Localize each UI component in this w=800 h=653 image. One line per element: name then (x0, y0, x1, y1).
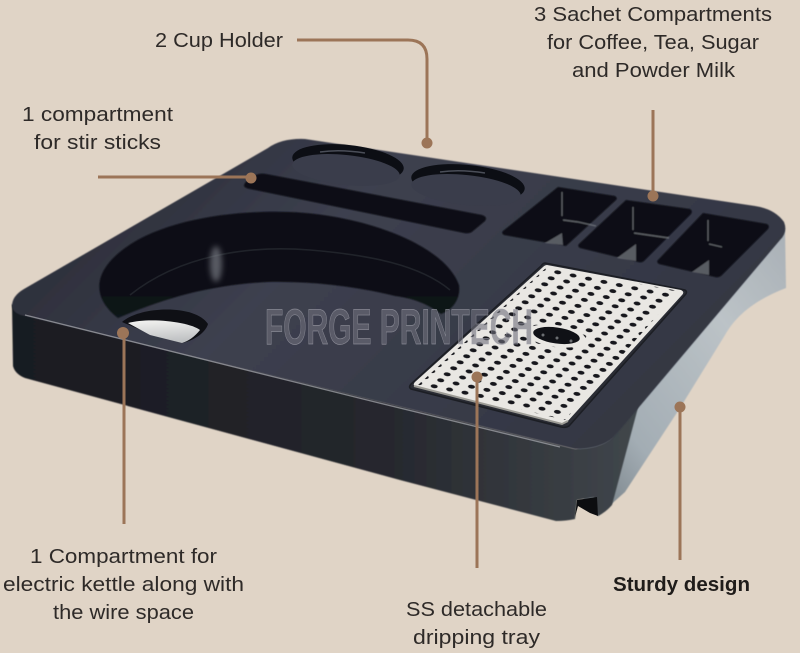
front edge highlight (25, 315, 560, 447)
notch in base (575, 497, 598, 517)
cup holders (290, 139, 527, 211)
leader line (122, 333, 126, 524)
label (22, 104, 173, 154)
label: the wire space (53, 602, 194, 624)
label: and Powder Milk (572, 60, 736, 82)
label: electric kettle along with (3, 574, 244, 596)
label: for Coffee, Tea, Sugar (547, 32, 759, 54)
sachet compartments (502, 187, 769, 277)
plate lower edge (414, 386, 568, 424)
label: 2 Cup Holder (155, 30, 283, 52)
label: SS detachable (406, 599, 547, 621)
leader dot (472, 372, 482, 382)
central drain oval (532, 324, 581, 347)
stir stick slot (244, 174, 486, 233)
stainless steel dripping tray (410, 263, 686, 427)
cup holder 1 (290, 139, 406, 191)
kettle well wall (99, 212, 459, 318)
kettle compartment (99, 212, 459, 343)
sachet compartment 2 (578, 200, 692, 262)
callout: sachet compartments (534, 4, 772, 202)
watermark: FORGE PRINTECH (265, 299, 533, 355)
leader dot (422, 138, 432, 148)
leader line (297, 40, 427, 143)
leader dot (674, 402, 686, 412)
tray top surface (12, 139, 785, 449)
label: 1 compartment (22, 104, 173, 126)
callout: dripping tray (406, 372, 547, 649)
label (3, 546, 244, 624)
kettle well highlight (210, 246, 222, 282)
label: dripping tray (413, 627, 540, 649)
leader line (678, 407, 682, 560)
callout: 2 cup holder (155, 30, 432, 148)
tray recess (410, 263, 686, 427)
wire hole (122, 310, 208, 343)
label (406, 599, 547, 649)
label: for stir sticks (34, 132, 161, 154)
callout: sturdy design (613, 402, 750, 596)
tray right side wall (560, 228, 786, 516)
leader dot (246, 172, 256, 184)
central clear zone (525, 321, 587, 351)
kettle well ledge shine (130, 249, 450, 295)
leader dot (117, 327, 129, 339)
leader dot (648, 190, 658, 202)
sachet compartment 1 (502, 187, 617, 246)
perforated plate (414, 265, 683, 423)
label: 1 Compartment for (30, 546, 217, 568)
label (534, 4, 772, 82)
cup holder 2 (409, 159, 527, 211)
leader line (476, 376, 478, 568)
label: 3 Sachet Compartments (534, 4, 772, 26)
product: black tray organiser (12, 139, 786, 521)
callout: stir sticks (22, 104, 256, 184)
sachet compartment 3 (657, 213, 769, 277)
plate holes (418, 267, 679, 420)
label: Sturdy design (613, 574, 750, 596)
leader line (98, 176, 250, 178)
tray front side wall (12, 304, 640, 521)
callout: electric kettle (3, 327, 244, 624)
leader line (652, 110, 654, 196)
